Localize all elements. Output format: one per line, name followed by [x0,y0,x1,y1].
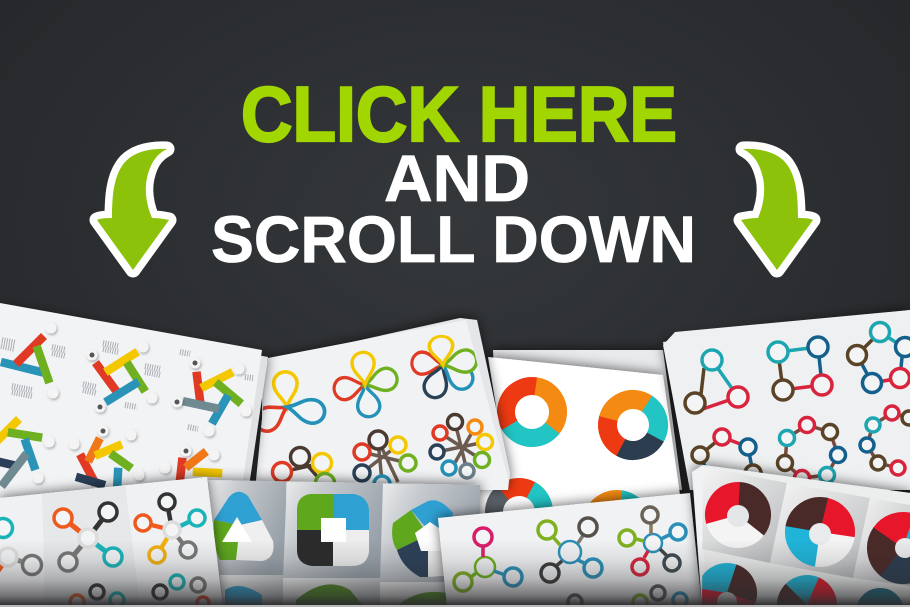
pie chart 3 [878,523,910,573]
small icon dots [32,322,252,484]
arrow diagram 2 [98,354,143,400]
thin light strip at the very bottom edge [0,605,910,607]
panel: grey rounded shape diagrams [207,478,480,607]
hub diagram, three nodes [454,528,522,591]
panel: centre stacked sheet with ring diagrams [480,345,685,514]
star diagram, four loops [768,337,832,400]
rounded pentagon diagram [392,500,456,577]
second row nodes [568,586,687,607]
arrow diagram 5 [80,442,128,490]
heading line: CLICK HERE: CLICK HERE [241,70,677,158]
second row nodes [70,575,209,607]
hub diagram, four nodes [538,518,602,582]
arrow diagram 1 [5,339,48,379]
star diagram, three loops [685,350,748,413]
node diagram centre [54,503,122,571]
panel: pie chart diagrams [692,465,910,607]
pie chart 4 [708,574,746,607]
icon: left curved green arrow [97,149,169,270]
star diagram, five loops [848,322,910,392]
pie chart 5 [786,584,828,607]
arrow diagram 4 [0,422,38,483]
faint caption lines [1,340,253,429]
ring diagram 1 [495,375,569,449]
pie chart 2 [799,511,841,553]
second row rounded shapes [225,584,446,605]
hub diagram, five nodes [619,507,686,575]
five petal diagram [411,335,478,401]
three petal diagram [260,370,326,433]
column backgrounds [208,478,480,607]
panel: petal loop diagrams [251,318,510,492]
connected loop diagram, nine circles [430,414,492,478]
ring diagram 4 [590,490,640,503]
rounded square diagram [297,494,369,566]
star diagram, second row centre [778,418,846,486]
pie chart 1 [715,492,761,538]
ring diagram 2 [597,389,669,461]
connected loop diagram, four visible [270,446,336,482]
pie chart 6 [868,600,892,607]
ring diagram 3 [485,478,552,514]
column tints [42,486,134,568]
arrow diagram 6 [180,454,218,480]
star diagram, second row right [860,406,910,475]
panel: arrow triangle diagrams [0,303,276,498]
node diagram left [0,518,42,575]
panel: loop star diagrams [663,310,910,490]
rounded triangle diagram [214,492,274,561]
arrow diagram 3 [187,374,238,420]
star diagram, second row left [690,427,763,473]
panel: connected node diagrams, bottom left [0,477,223,607]
connected loop diagram, seven circles [354,431,416,492]
icon: right curved green arrow [741,149,813,270]
four petal diagram [332,351,400,418]
heading line: AND: AND [384,141,530,215]
grey tile backgrounds [697,467,910,586]
heading line: SCROLL DOWN: SCROLL DOWN [211,202,696,276]
node diagram right [135,494,205,563]
panel: connector diagrams with hubs [438,493,702,607]
heading: call to action [211,70,696,276]
bottom dark fade over the sheets [0,540,910,605]
